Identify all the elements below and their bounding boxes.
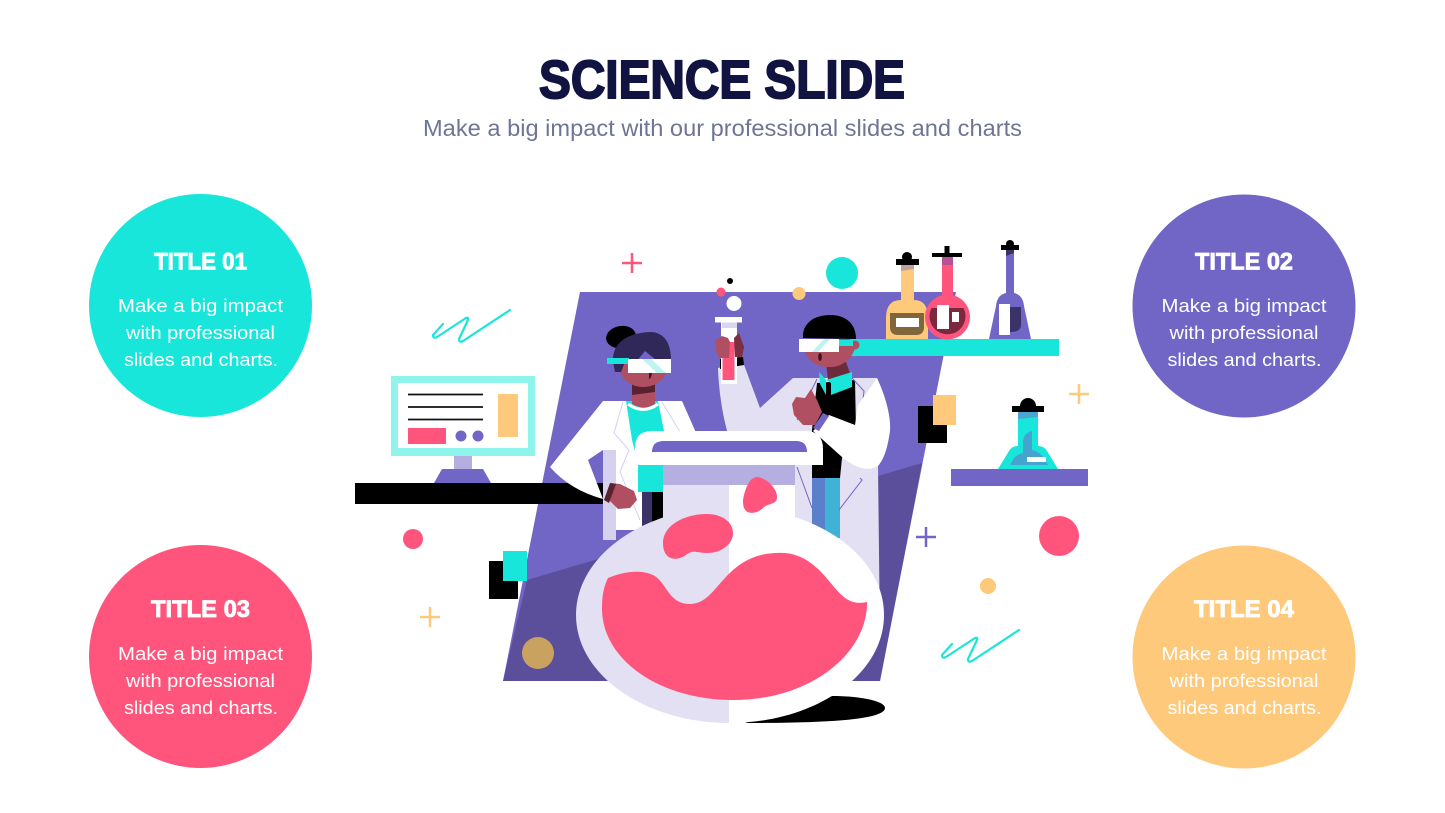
subtitle: Make a big impact with our professional slides and charts xyxy=(423,115,1022,141)
neck xyxy=(632,384,655,408)
black sleeve band xyxy=(720,357,744,369)
scientist: man xyxy=(700,315,890,640)
coat and body xyxy=(550,401,700,530)
pink round flask xyxy=(925,246,970,340)
trousers xyxy=(642,492,653,528)
mouth xyxy=(649,373,652,379)
pink liquid xyxy=(602,553,867,700)
top shelf with bottles xyxy=(850,240,1059,356)
collar xyxy=(628,404,658,410)
flask body right xyxy=(729,507,884,723)
purple backdrop xyxy=(503,292,956,681)
panel: title 02: slides and charts. xyxy=(1168,349,1322,370)
panel: title 02: Make a big impact xyxy=(1162,295,1326,316)
goggles xyxy=(607,358,629,364)
panel: title 02 xyxy=(1132,194,1356,418)
pink droplet xyxy=(743,477,777,513)
plus signs xyxy=(420,253,1089,627)
coat lapels xyxy=(797,378,864,510)
lower shelf with teal flask xyxy=(951,398,1088,486)
right sleeve xyxy=(813,378,890,469)
squiggles xyxy=(433,310,1019,662)
purple bottle xyxy=(989,240,1031,339)
hand holding tube xyxy=(716,336,730,358)
computer monitor xyxy=(391,376,535,483)
black table xyxy=(355,483,610,504)
panel: title 03: Make a big impact xyxy=(118,643,283,664)
raised arm and coat xyxy=(700,362,880,640)
head xyxy=(803,345,855,367)
neck xyxy=(826,362,851,380)
collar xyxy=(819,372,852,395)
scientist: woman xyxy=(550,324,700,540)
hand xyxy=(608,483,637,509)
panel: title 01 xyxy=(89,194,312,417)
panel: title 04: Make a big impact xyxy=(1162,643,1326,664)
orange bottle xyxy=(886,252,928,339)
panel: title 03: TITLE 03 xyxy=(151,596,250,623)
panel: title 02: with professional xyxy=(1168,322,1318,343)
lapel lines xyxy=(614,402,680,520)
shirt xyxy=(626,401,664,492)
panel: title 04: slides and charts. xyxy=(1168,697,1322,718)
panel: title 04 xyxy=(1132,546,1356,768)
panel: title 02: TITLE 02 xyxy=(1195,248,1293,276)
panel: title 01: TITLE 01 xyxy=(154,248,247,276)
title: SCIENCE SLIDE xyxy=(539,50,905,110)
panel: title 03: with professional xyxy=(125,670,275,691)
pink splash xyxy=(663,514,733,559)
squares xyxy=(489,395,956,599)
panel: title 03 xyxy=(89,545,312,768)
large flask xyxy=(576,431,884,723)
hand xyxy=(792,389,822,425)
vest xyxy=(812,380,856,478)
panel: title 01: Make a big impact xyxy=(118,295,283,316)
goggles xyxy=(839,340,853,346)
flask rim xyxy=(635,431,823,465)
test tube xyxy=(721,322,737,384)
bun xyxy=(604,324,638,350)
hair xyxy=(613,332,671,372)
illustration: science lab xyxy=(355,240,1089,723)
panel: title 04: TITLE 04 xyxy=(1194,596,1295,623)
panel: title 01: with professional xyxy=(125,322,275,343)
panel: title 03: slides and charts. xyxy=(124,697,278,718)
flask neck xyxy=(663,465,729,525)
mouth xyxy=(818,353,822,361)
head xyxy=(618,362,669,387)
panel: title 01: slides and charts. xyxy=(124,349,278,370)
flask body left xyxy=(576,507,730,723)
trousers xyxy=(812,478,826,538)
hair xyxy=(803,315,856,339)
floor shadow xyxy=(745,696,885,723)
panel: title 04: with professional xyxy=(1168,670,1318,691)
cuff xyxy=(813,413,829,431)
decorative bubbles xyxy=(403,257,1079,669)
